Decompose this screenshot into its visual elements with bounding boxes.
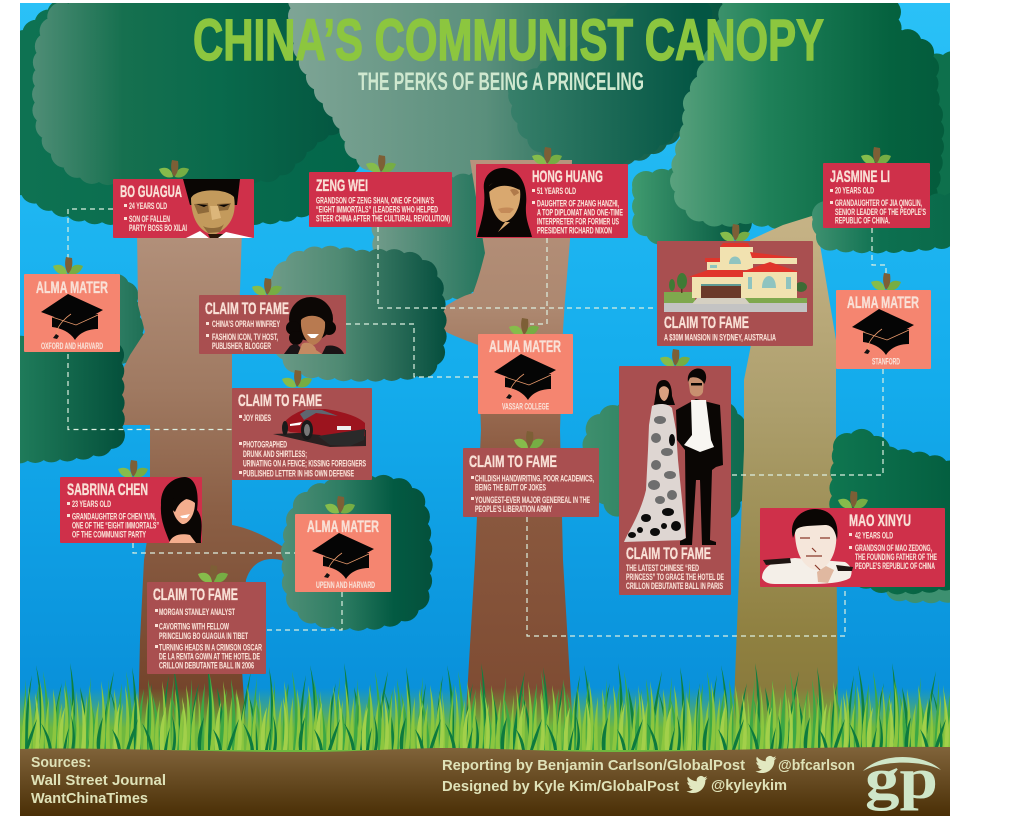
icon: sprout [366,155,396,173]
portrait: Bo Guagua [183,179,253,238]
icon: sprout [198,565,228,583]
name: JASMINE LI [830,167,890,186]
details: 42 YEARS OLD [855,530,893,540]
details: OF THE COMMUNIST PARTY [72,530,146,540]
icon: sprout [159,160,189,178]
portrait: Mao Xinyu [762,509,853,584]
details: FASHION ICON, TV HOST, [212,332,278,342]
panel: Zeng Wei [309,155,452,227]
icon: sprout [532,147,562,165]
details: GRANDAUGHTER OF JIA QINGLIN, [835,198,922,208]
details: SENIOR LEADER OF THE PEOPLE’S [835,207,926,217]
details: PEOPLE’S LIBERATION ARMY [475,504,552,514]
panel: Mao Xinyu [760,491,945,587]
panel: Claim to Fame Morgan Stanley [147,565,266,674]
heading: CLAIM TO FAME [469,452,557,471]
details: PRESIDENT RICHARD NIXON [537,226,612,236]
heading: ALMA MATER [489,337,561,356]
details: BEING THE BUTT OF JOKES [475,482,546,492]
trunk: left tree [120,230,296,730]
details: GRANDSON OF ZENG SHAN, ONE OF CHINA’S [316,196,434,206]
icon: sprout [861,147,891,165]
logo: gp: gp [865,746,938,811]
details: TURNING HEADS IN A CRIMSON OSCAR [159,642,262,652]
icon: sprout [118,460,148,478]
credits [442,756,855,795]
details [316,196,450,224]
icon: twitter bird [756,756,776,773]
name: MAO XINYU [849,511,911,530]
details: GRANDAUGHTER OF CHEN YUN, [72,512,156,522]
heading: ALMA MATER [307,517,379,536]
school: OXFORD AND HARVARD [41,341,103,351]
canopy: top left back [6,0,350,211]
details: STEER CHINA AFTER THE CULTURAL REVOLUTION) [316,214,450,224]
heading: CLAIM TO FAME [626,544,711,563]
details: PARTY BOSS BO XILAI [129,223,187,233]
heading: CLAIM TO FAME [153,585,238,604]
icon: graduation cap [41,294,103,340]
icon: sprout [252,278,282,296]
details: 23 YEARS OLD [72,499,111,509]
heading: CLAIM TO FAME [238,391,322,410]
details [155,607,262,670]
icon: sprout [53,257,83,275]
canopy: top centre grey-green [302,0,718,166]
dashed connector lines [68,209,886,636]
details: “EIGHT IMMORTALS” (LEADERS WHO HELPED [316,204,438,214]
picture: red sports car [273,409,366,447]
picture: couple at debutante ball [624,368,723,545]
panel: Claim to Fame red princess [619,349,731,595]
details: REPUBLIC OF CHINA. [835,216,890,226]
canopy: top right big tree [684,0,930,220]
panel: Claim to Fame handwriting [463,431,599,517]
canopy: lower right lobes [646,175,740,234]
details: PRINCELING BO GUAGUA IN TIBET [159,631,248,641]
icon: graduation cap [494,354,556,400]
panel: Claim to Fame mansion [657,224,813,346]
grass [20,664,950,752]
heading: CLAIM TO FAME [664,313,749,332]
school: STANFORD [872,356,900,366]
icon: sprout [514,431,544,449]
canopy: middle oprah cluster [280,260,433,368]
canopy: jasmine side lobes [826,205,975,239]
canopy: top left front [46,0,335,172]
details: THE LATEST CHINESE “RED [626,563,699,573]
details: DAUGHTER OF ZHANG HANZHI, [537,198,619,208]
details [124,201,187,233]
credits: Reporting by Benjamin Carlson/GlobalPost [442,757,745,774]
details [830,186,926,226]
credits: @kyleykim [711,777,787,794]
portrait: Sabrina Chen [161,477,202,543]
details: CAVORTING WITH FELLOW [159,622,229,632]
canopy: bottom right lower lobes [886,589,950,604]
name: HONG HUANG [532,167,603,186]
details: SON OF FALLEN [129,214,170,224]
canopy: left upper behind alma mater [114,274,144,364]
details: INTERPRETER FOR FORMER US [537,216,619,226]
name: BO GUAGUA [120,182,182,201]
details: 24 YEARS OLD [129,201,167,211]
panel: Claim to Fame Oprah [199,278,346,354]
school: VASSAR COLLEGE [502,402,549,412]
trunk: right tree [733,215,838,730]
name: ZENG WEI [316,176,368,195]
details: PHOTOGRAPHED [243,440,287,450]
details [67,499,159,540]
details: PEOPLE’S REPUBLIC OF CHINA [855,561,935,571]
details [239,413,366,478]
picture: mansion [664,243,807,312]
details [849,530,937,571]
details: PRINCESS” TO GRACE THE HOTEL DE [626,572,724,582]
details: CHILDISH HANDWRITING, POOR ACADEMICS, [475,474,594,484]
school: UPENN AND HARVARD [316,580,375,590]
details: THE FOUNDING FATHER OF THE [855,552,937,562]
panel: Bo Guagua [113,160,254,238]
sources: Wall Street Journal [31,772,166,789]
details: 51 YEARS OLD [537,186,576,196]
details [471,474,594,514]
details: ONE OF THE “EIGHT IMMORTALS” [72,520,159,530]
canopy: right back [933,51,950,196]
icon: sprout [282,370,312,388]
details: PUBLISHER, BLOGGER [212,341,271,351]
details: CRILLON DEBUTANTE BALL IN 2006 [159,660,254,670]
panel: Alma Mater Oxford and Harvard [24,257,120,352]
details: GRANDSON OF MAO ZEDONG, [855,543,932,553]
details: JOY RIDES [243,413,271,423]
details: CHINA’S OPRAH WINFREY [212,319,280,329]
details [532,186,623,236]
sources: Sources: [31,754,91,771]
details: 20 YEARS OLD [835,186,874,196]
details: DRUNK AND SHIRTLESS; [243,449,307,459]
panel: Sabrina Chen [60,460,202,543]
details: PUBLISHED LETTER IN HIS OWN DEFENSE [243,468,354,478]
credits: Designed by Kyle Kim/GlobalPost [442,778,679,795]
details: URINATING ON A FENCE; KISSING FOREIGNERS [243,458,366,468]
details: A $30M MANSION IN SYDNEY, AUSTRALIA [664,332,776,342]
heading: ALMA MATER [847,293,919,312]
panel: Alma Mater UPenn and Harvard [295,496,391,592]
details: MORGAN STANLEY ANALYST [159,607,235,617]
panel: Jasmine Li [823,147,930,228]
portrait: Hong Huang [477,168,532,237]
panel: Alma Mater Stanford [836,273,931,369]
heading: CLAIM TO FAME [205,299,289,318]
icon: sprout [871,273,901,291]
trunk: centre tree [440,160,573,730]
canopy: behind centre trunk [384,185,482,287]
icon: graduation cap [852,309,914,355]
canopy: upenn cluster [295,489,419,617]
icon: graduation cap [312,533,374,579]
sources [31,754,166,807]
portrait: Oprah-style photo [284,297,344,354]
panel: Alma Mater Vassar [478,318,573,414]
icon: sprout [720,224,750,242]
canopy: top centre dark lobe [522,8,699,155]
name: SABRINA CHEN [67,480,148,499]
details [626,563,724,591]
details: DE LA RENTA GOWN AT THE HOTEL DE [159,652,260,662]
canopy: left lower cluster [5,348,111,450]
credits: @bfcarlson [778,757,855,774]
icon: twitter bird [686,776,707,793]
details [206,319,280,351]
heading: ALMA MATER [36,278,108,297]
sources: WantChinaTimes [31,790,148,807]
ground [20,747,950,816]
icon: sprout [509,318,539,336]
icon: sprout [838,491,868,509]
details: CRILLON DEBUTANTE BALL IN PARIS [626,581,723,591]
details: A TOP DIPLOMAT AND ONE-TIME [537,208,623,218]
icon: sprout [325,496,355,514]
subtitle: THE PERKS OF BEING A PRINCELING [358,68,644,96]
panel: Claim to Fame car [232,370,372,480]
canopy: bottom right cluster [843,442,965,581]
canopy: behind red princess [596,411,734,514]
icon: sprout [660,349,690,367]
panel: Hong Huang [476,147,628,238]
details: YOUNGEST-EVER MAJOR GENEREAL IN THE [475,495,590,505]
